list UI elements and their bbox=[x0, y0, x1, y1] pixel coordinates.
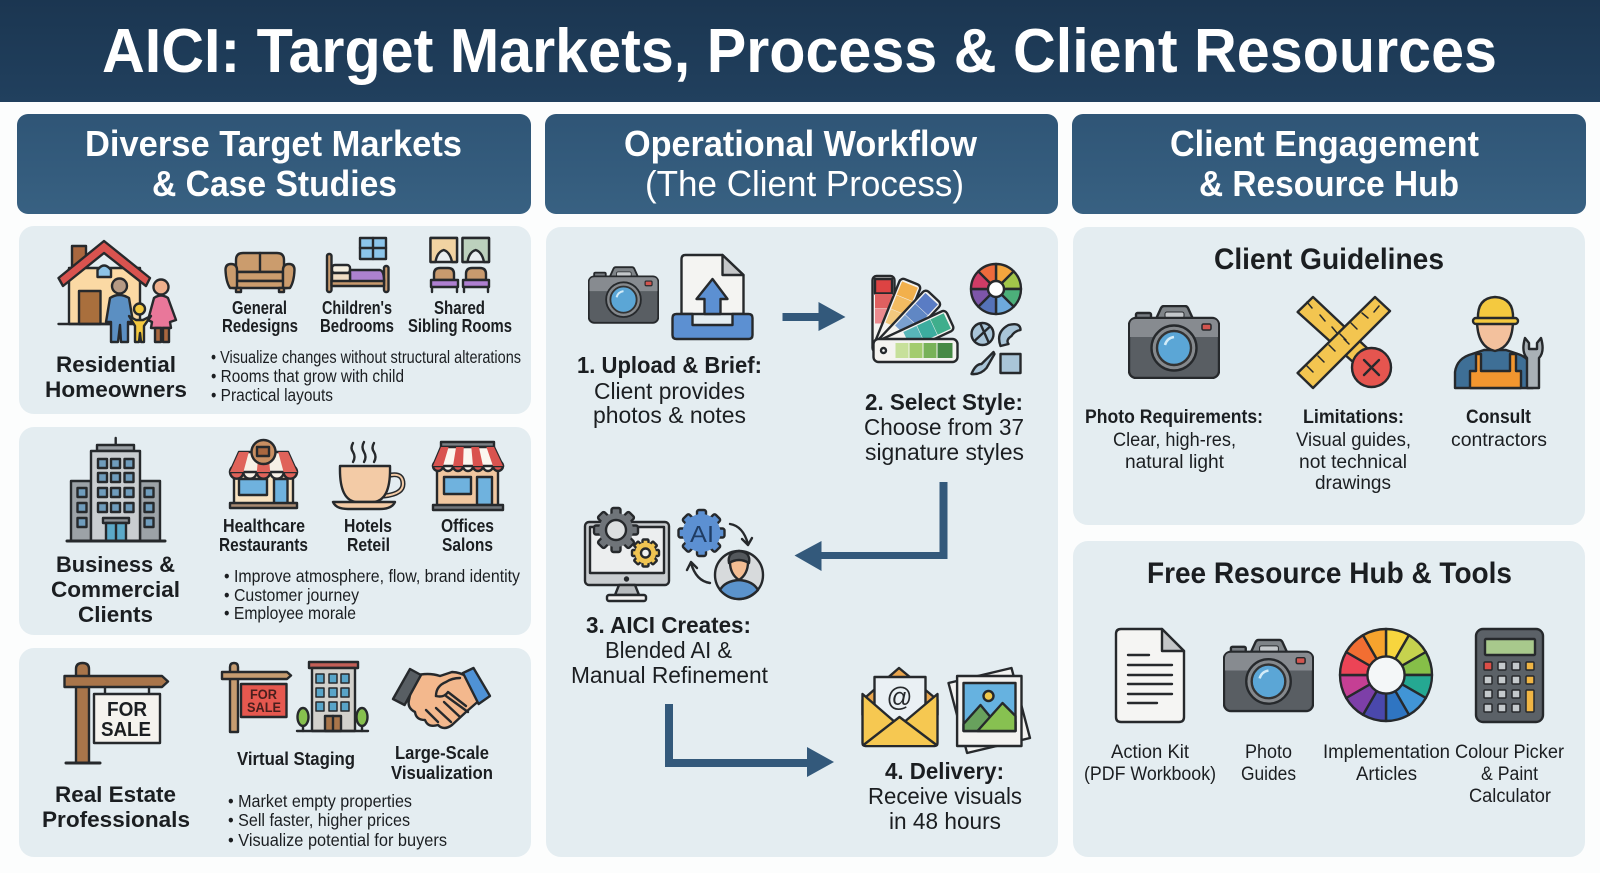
step 3 text: Manual Refinement bbox=[571, 662, 769, 688]
label: shared sibling rooms bbox=[408, 298, 512, 336]
label: offices salons: Salons bbox=[442, 535, 493, 555]
icon: colour wheel bbox=[1335, 624, 1437, 726]
step 2 text: 2. Select Style: bbox=[865, 389, 1023, 415]
icon: office storefront bbox=[433, 442, 503, 510]
label: shared sibling rooms: Sibling Rooms bbox=[408, 316, 512, 336]
icon: shared sibling room bbox=[430, 238, 489, 292]
icon: camera bbox=[1224, 640, 1313, 711]
icon: office building bbox=[67, 438, 165, 541]
heading: residential homeowners: Residential bbox=[56, 352, 176, 377]
arrow: step 2 to step 3 bbox=[794, 482, 948, 571]
panel: operational workflow bbox=[546, 227, 1058, 857]
material samples bbox=[972, 323, 1020, 374]
label: hotels retail: Reteil bbox=[347, 535, 390, 555]
icon: sofa bbox=[226, 253, 294, 292]
label: general redesigns: General bbox=[232, 298, 287, 318]
step 2 text bbox=[864, 389, 1024, 465]
icon: handshake bbox=[393, 668, 490, 728]
label: action kit: (PDF Workbook) bbox=[1084, 764, 1216, 785]
step 4 text: 4. Delivery: bbox=[885, 758, 1004, 784]
column heading: target markets bbox=[17, 114, 531, 214]
step 3 text: 3. AICI Creates: bbox=[586, 612, 751, 638]
step 2 text: Choose from 37 bbox=[864, 414, 1024, 440]
icon: colour fan and swatches bbox=[872, 259, 1026, 374]
bullet list: residential: • Visualize changes without structural alterations bbox=[211, 347, 521, 367]
label: implementation articles bbox=[1323, 742, 1450, 785]
panel: business and commercial clients bbox=[19, 427, 531, 635]
icon: virtual staging: SALE bbox=[247, 700, 281, 715]
label: photo guides: Photo bbox=[1245, 742, 1292, 763]
bullet list: residential: • Practical layouts bbox=[211, 385, 333, 405]
label: children's bedrooms: Children's bbox=[322, 298, 392, 318]
icon: crossed rulers with x bbox=[1298, 297, 1391, 388]
bullet list: real estate bbox=[228, 791, 447, 850]
text: limitations: Limitations: bbox=[1303, 407, 1404, 428]
label: colour picker and paint calculator: & Paint bbox=[1481, 764, 1539, 785]
arrow: step 3 to step 4 bbox=[665, 704, 834, 777]
colour wheel bbox=[966, 259, 1026, 319]
heading: business and commercial clients: Clients bbox=[78, 602, 153, 627]
label: action kit bbox=[1084, 742, 1216, 785]
heading: business and commercial clients: Commercial bbox=[51, 577, 180, 602]
arrow: step 1 to step 2 bbox=[782, 302, 846, 331]
bullet list: residential: • Rooms that grow with child bbox=[211, 366, 404, 386]
label: children's bedrooms: Bedrooms bbox=[320, 316, 394, 336]
heading: real estate professionals bbox=[42, 782, 190, 832]
label: healthcare restaurants bbox=[219, 516, 308, 555]
text: photo requirements: Clear, high-res, bbox=[1113, 430, 1236, 451]
step 2 text: signature styles bbox=[865, 439, 1024, 465]
label: offices salons: Offices bbox=[441, 516, 494, 536]
label: hotels retail bbox=[344, 516, 392, 555]
label: large-scale visualization: Visualization bbox=[391, 763, 493, 783]
step 3 text: Blended AI & bbox=[605, 637, 732, 663]
label: large-scale visualization: Large-Scale bbox=[395, 743, 489, 763]
icon: virtual staging bbox=[222, 662, 368, 732]
heading: real estate professionals: Real Estate bbox=[55, 782, 176, 807]
icon: contractor with wrench bbox=[1455, 297, 1543, 388]
icon: children's bed bbox=[327, 238, 388, 292]
label: photo guides: Guides bbox=[1241, 764, 1296, 785]
text: photo requirements bbox=[1085, 407, 1263, 473]
bullet list: residential bbox=[211, 347, 521, 405]
step 4 text: in 48 hours bbox=[889, 808, 1001, 834]
label: hotels retail: Hotels bbox=[344, 516, 392, 536]
column heading: workflow: (The Client Process) bbox=[645, 163, 964, 204]
bullet list: business: • Customer journey bbox=[224, 585, 359, 605]
icon: camera bbox=[1129, 306, 1219, 378]
step 1 text: photos & notes bbox=[593, 402, 746, 428]
heading: client guidelines: Client Guidelines bbox=[1214, 243, 1444, 276]
label: healthcare restaurants: Restaurants bbox=[219, 535, 308, 555]
label: offices salons bbox=[441, 516, 494, 555]
icon: calculator bbox=[1476, 629, 1543, 722]
bullet list: real estate: • Visualize potential for buyers bbox=[228, 830, 447, 850]
column heading: engagement: Client Engagement bbox=[1170, 123, 1479, 164]
label: colour picker and paint calculator: Calculator bbox=[1469, 786, 1552, 807]
text: limitations: Visual guides, bbox=[1296, 430, 1411, 451]
icon: AI creation bbox=[585, 508, 763, 601]
text: photo requirements: Photo Requirements: bbox=[1085, 407, 1263, 428]
label: colour picker and paint calculator bbox=[1455, 742, 1565, 807]
text: consult contractors bbox=[1451, 407, 1547, 451]
title banner bbox=[0, 0, 1600, 102]
step 4 text: Receive visuals bbox=[868, 783, 1022, 809]
icon: AI creation: AI bbox=[690, 521, 714, 547]
bullet list: business: • Employee morale bbox=[224, 603, 356, 623]
column heading: engagement bbox=[1072, 114, 1586, 214]
heading: real estate professionals: Professionals bbox=[42, 807, 190, 832]
icon: email and photos bbox=[862, 668, 1030, 753]
heading: free resource hub: Free Resource Hub & Tools bbox=[1147, 557, 1512, 590]
label: healthcare restaurants: Healthcare bbox=[223, 516, 305, 536]
label: shared sibling rooms: Shared bbox=[434, 298, 485, 318]
step 4 text bbox=[868, 758, 1022, 834]
icon: coffee cup bbox=[333, 442, 403, 509]
heading: residential homeowners: Homeowners bbox=[45, 377, 187, 402]
step 1 text bbox=[577, 352, 762, 428]
panel: real estate professionals bbox=[19, 648, 531, 857]
bullet list: real estate: • Market empty properties bbox=[228, 791, 412, 811]
bullet list: business: • Improve atmosphere, flow, brand identity bbox=[224, 566, 520, 586]
panel: free resource hub and tools bbox=[1073, 541, 1585, 857]
title banner: AICI: Target Markets, Process & Client Resources bbox=[102, 17, 1497, 86]
label: photo guides bbox=[1241, 742, 1296, 785]
label: general redesigns bbox=[222, 298, 298, 336]
text: consult contractors: contractors bbox=[1451, 430, 1547, 451]
column heading: target markets: Diverse Target Markets bbox=[85, 123, 462, 164]
icon: for sale sign bbox=[64, 663, 168, 763]
text: consult contractors: Consult bbox=[1466, 407, 1532, 428]
icon: for sale sign: SALE bbox=[101, 719, 151, 741]
label: general redesigns: Redesigns bbox=[222, 316, 298, 336]
heading: business and commercial clients: Business & bbox=[56, 552, 175, 577]
column heading: target markets: & Case Studies bbox=[152, 163, 397, 204]
panel: residential homeowners bbox=[19, 226, 531, 414]
icon: for sale sign: FOR bbox=[107, 699, 148, 721]
label: children's bedrooms bbox=[320, 298, 394, 336]
panel: client guidelines bbox=[1073, 227, 1585, 525]
column heading: engagement: & Resource Hub bbox=[1199, 163, 1459, 204]
label: large-scale visualization bbox=[391, 743, 493, 783]
heading: business and commercial clients bbox=[51, 552, 180, 627]
step 1 text: 1. Upload & Brief: bbox=[577, 352, 762, 378]
bullet list: business bbox=[224, 566, 520, 623]
icon: camera and upload bbox=[589, 255, 752, 339]
text: limitations bbox=[1296, 407, 1411, 494]
text: limitations: drawings bbox=[1315, 473, 1391, 494]
heading: residential homeowners bbox=[45, 352, 187, 402]
label: action kit: Action Kit bbox=[1111, 742, 1190, 763]
bullet list: real estate: • Sell faster, higher prices bbox=[228, 810, 410, 830]
icon: house and family bbox=[58, 241, 176, 342]
label: implementation articles: Articles bbox=[1356, 764, 1417, 785]
label: implementation articles: Implementation bbox=[1323, 742, 1450, 763]
text: photo requirements: natural light bbox=[1125, 452, 1225, 473]
label: virtual staging: Virtual Staging bbox=[237, 749, 355, 769]
icon: document bbox=[1116, 629, 1184, 722]
text: limitations: not technical bbox=[1299, 452, 1407, 473]
icon: email and photos: @ bbox=[886, 682, 912, 712]
step 3 text bbox=[571, 612, 769, 688]
column heading: workflow bbox=[545, 114, 1058, 214]
column heading: workflow: Operational Workflow bbox=[624, 123, 978, 164]
icon: healthcare storefront bbox=[230, 440, 297, 508]
label: colour picker and paint calculator: Colour Picker bbox=[1455, 742, 1565, 763]
step 1 text: Client provides bbox=[594, 378, 745, 404]
icon: virtual staging: FOR bbox=[250, 687, 277, 702]
